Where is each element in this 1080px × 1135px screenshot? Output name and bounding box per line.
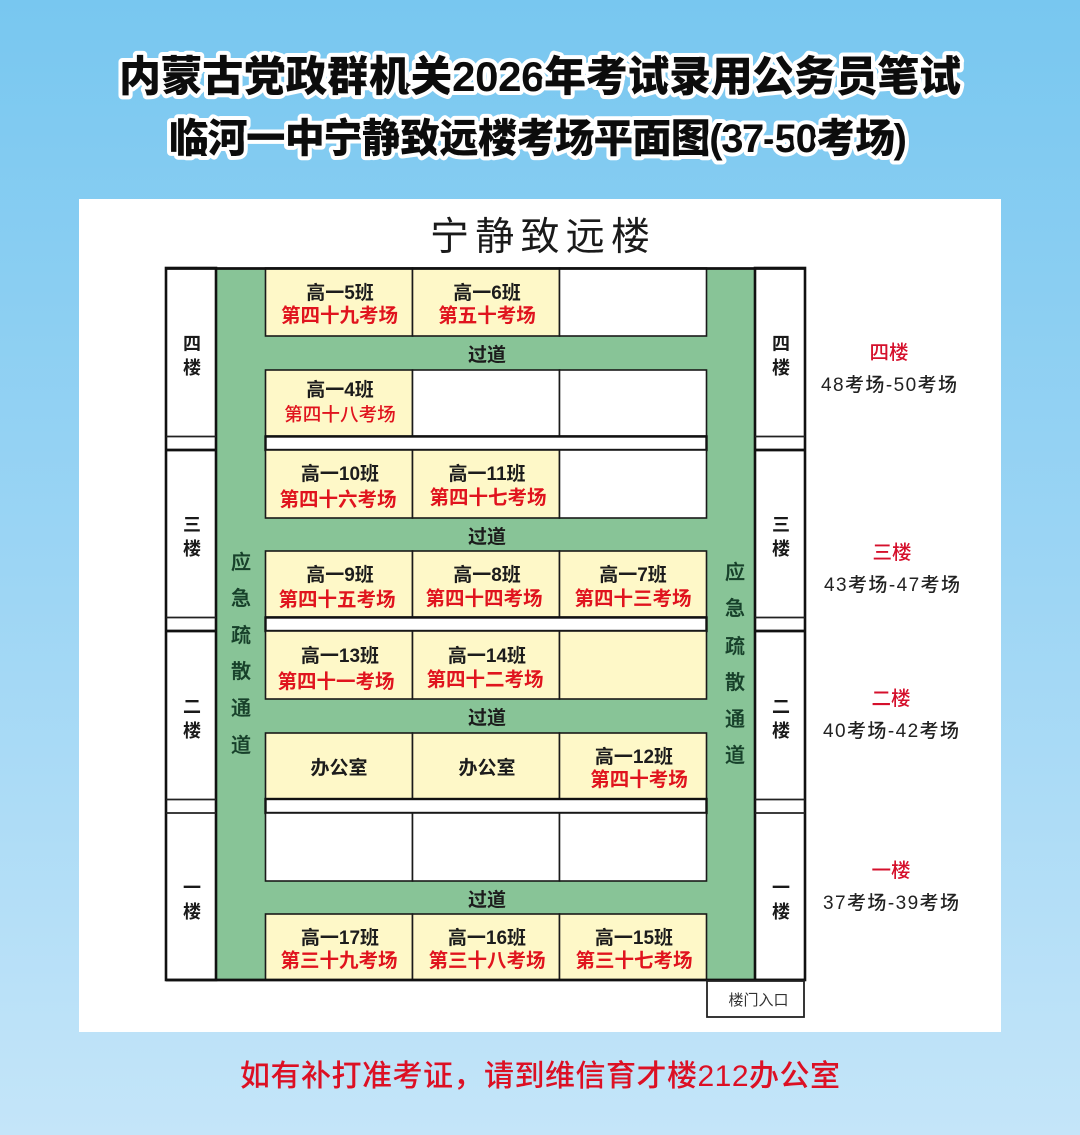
floor 3 rooms: 高一11班 [448,462,526,485]
stairwell: right: 楼 [772,358,790,378]
label: left emergency passage: 疏 [231,624,251,647]
floor 2 rooms: 过道 [468,706,506,729]
stairwell: right: 二 [772,697,790,717]
stairwell: left: 三 [183,515,201,535]
gap between floors 4 and 3 [266,436,706,450]
title [119,53,961,161]
floor legend: 4: 48考场-50考场 [821,374,957,396]
floor legend: 3: 43考场-47考场 [824,574,960,596]
label: right emergency passage [725,561,745,767]
label: right emergency passage: 道 [725,744,745,767]
stairwell: left: 一 [183,878,201,898]
floor 3 rooms: 第四十四考场 [425,588,543,610]
floor 3 rooms: 高一9班 [306,563,374,586]
label: left emergency passage: 应 [231,551,251,574]
stairwell: right: 四 [772,334,790,354]
gap between floors 3 and 2 [266,618,706,631]
label: left emergency passage: 通 [231,697,251,720]
label: right emergency passage: 急 [725,597,745,620]
floor 2 rooms: 高一12班 [595,745,673,768]
stairwell: right: 楼 [772,721,790,741]
floor 3 rooms: 高一7班 [599,563,667,586]
floor 2 rooms: 高一13班 [301,644,379,667]
title: 临河一中宁静致远楼考场平面图(37-50考场) [169,117,907,161]
floor 2 rooms: 第四十二考场 [426,669,544,691]
floor 4 rooms: 高一6班 [453,281,521,304]
heading: building name: 宁静致远楼 [430,216,650,259]
stairwell: right [755,268,805,980]
emergency corridor [216,268,755,980]
stairwell: left: 楼 [183,721,201,741]
floor 3 rooms: 第四十六考场 [279,489,397,511]
floor legend: 2: 40考场-42考场 [823,720,959,742]
stairwell: right: 三 [772,515,790,535]
floor legend: 1 [823,860,959,914]
floor 4 rooms [266,268,706,436]
floor legend: 4: 四楼 [869,342,909,364]
floor 3 rooms [266,450,706,617]
floor 4 rooms: 第四十八考场 [284,404,396,425]
floor 1 rooms: 第三十七考场 [575,950,693,972]
floor 2 rooms: 办公室 [310,756,368,779]
floor 2 rooms: 第四十考场 [590,769,688,791]
stairwell: left: 楼 [183,539,201,559]
stairwell: left: 四 [183,334,201,354]
stairwell: right: 楼 [772,539,790,559]
floor legend: 3 [824,542,960,596]
floor 4 rooms: 第五十考场 [438,305,536,327]
floor 1 rooms [266,813,706,980]
floor 2 rooms [266,631,706,799]
floor 3 rooms: 第四十五考场 [278,589,396,611]
floor 1 rooms: 第三十八考场 [428,950,546,972]
floor 4 rooms: 第四十九考场 [281,305,398,327]
floor 3 rooms: 过道 [468,525,506,548]
stairwell: right: 楼 [772,902,790,922]
floor 4 rooms: 过道 [468,343,506,366]
floor legend: 2 [823,688,959,742]
building entrance [707,981,804,1017]
floor 3 rooms: 高一10班 [301,462,379,485]
floor 1 rooms: 高一16班 [448,926,526,949]
floor 1 rooms: 第三十九考场 [280,950,398,972]
stairwell: left: 楼 [183,902,201,922]
label: right emergency passage: 通 [725,708,745,731]
floor 1 rooms: 高一15班 [595,926,673,949]
label: left emergency passage: 道 [231,734,251,757]
floor legend: 1: 一楼 [871,860,911,882]
floor 3 rooms: 高一8班 [453,563,521,586]
stairwell: left [166,268,216,980]
stairwell: left: 楼 [183,358,201,378]
label: left emergency passage [231,551,251,757]
label: right emergency passage: 散 [725,671,745,694]
label: left emergency passage: 急 [231,587,251,610]
stairwell: right: 一 [772,878,790,898]
panel: floor plan [79,199,1001,1032]
building entrance: 楼门入口 [728,992,789,1009]
outer frame top and bottom [166,268,805,980]
floor legend: 2: 二楼 [871,688,911,710]
floor 4 rooms: 高一4班 [306,378,374,401]
floor 3 rooms: 第四十七考场 [429,487,547,509]
stairwell: left: 二 [183,697,201,717]
label: right emergency passage: 疏 [725,635,745,658]
floor 3 rooms: 第四十三考场 [574,588,692,610]
label: right emergency passage: 应 [725,561,745,584]
floor legend: 3: 三楼 [872,542,912,564]
floor 1 rooms: 过道 [468,888,506,911]
floor legend: 1: 37考场-39考场 [823,892,959,914]
floor 2 rooms: 高一14班 [448,644,526,667]
label: left emergency passage: 散 [231,660,251,683]
floor 1 rooms: 高一17班 [301,926,379,949]
footer notice: 如有补打准考证，请到维信育才楼212办公室 [240,1060,840,1093]
title: 内蒙古党政群机关2026年考试录用公务员笔试 [119,53,961,100]
floor 4 rooms: 高一5班 [306,281,374,304]
gap between floors 2 and 1 [266,799,706,813]
floor legend: 4 [821,342,957,396]
floor 2 rooms: 第四十一考场 [277,671,395,693]
floor 2 rooms: 办公室 [458,756,516,779]
